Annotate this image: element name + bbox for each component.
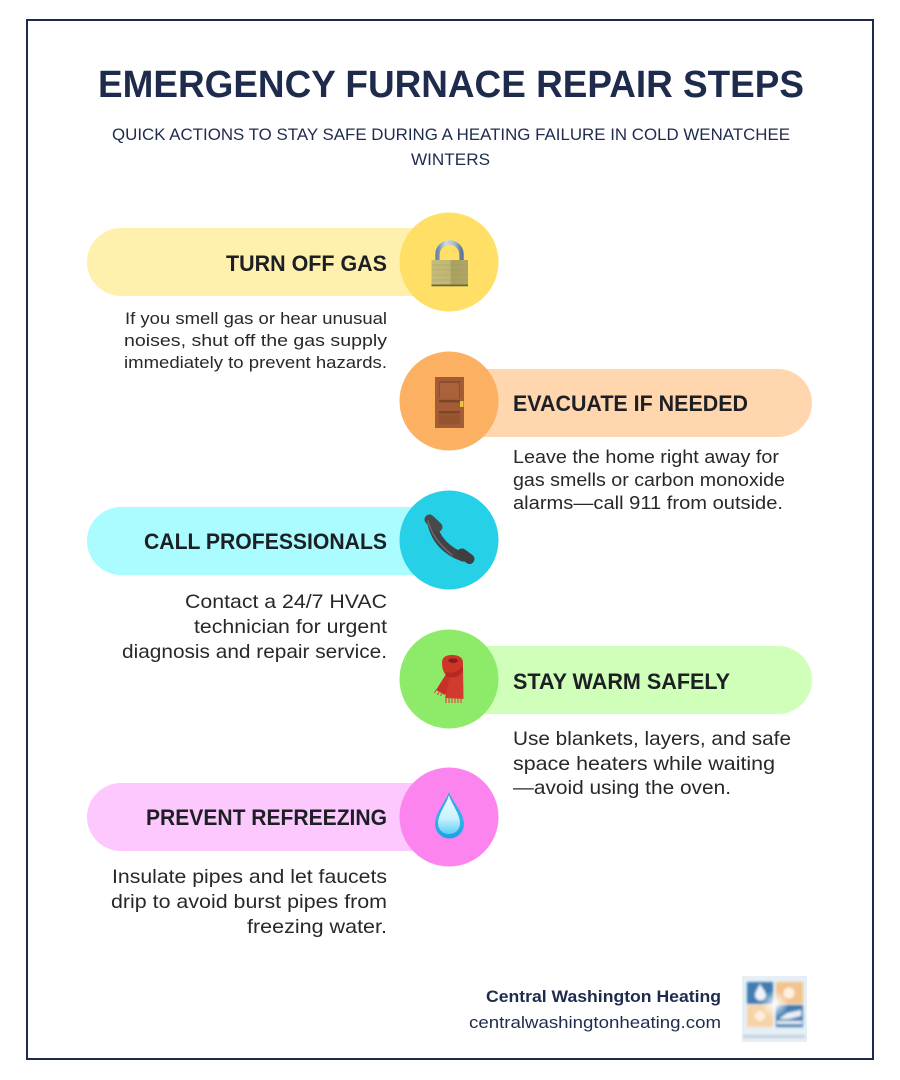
step 2 description [513, 447, 785, 513]
icon: padlock [432, 242, 468, 286]
step 1 description [124, 309, 388, 372]
step 3 description: Contact a 24/7 HVAC [185, 591, 387, 613]
icon: door [435, 377, 464, 428]
step 3 description: diagnosis and repair service. [122, 641, 387, 663]
step 5 pill [87, 783, 467, 851]
step 3 heading: CALL PROFESSIONALS [144, 529, 387, 554]
step 3 description: technician for urgent [194, 616, 388, 638]
step 1 heading: TURN OFF GAS [226, 251, 387, 276]
step 5 description [111, 866, 387, 938]
step 4: stay warm safely [400, 630, 812, 799]
step 3: call professionals [87, 490, 498, 663]
footer company name and website: centralwashingtonheating.com [469, 1013, 721, 1032]
step 3 description [122, 591, 388, 663]
step 1 description: noises, shut off the gas supply [124, 331, 388, 350]
subtitle: WINTERS [411, 150, 490, 169]
subtitle: QUICK ACTIONS TO STAY SAFE DURING A HEATING FAILURE IN COLD WENATCHEE [112, 125, 790, 144]
step 2: evacuate if needed [400, 352, 812, 513]
step 5 description: freezing water. [247, 916, 387, 938]
step 1: turn off gas [87, 212, 498, 372]
icon: red scarf [434, 655, 464, 703]
step 4 pill [432, 646, 812, 714]
step 4 description: Use blankets, layers, and safe [513, 728, 791, 750]
step 1 circle [400, 212, 498, 312]
step 1 description: If you smell gas or hear unusual [125, 309, 387, 328]
step 1 description: immediately to prevent hazards. [124, 353, 387, 372]
company logo [742, 976, 807, 1042]
step 2 circle [400, 352, 498, 450]
step 4 circle [400, 630, 498, 728]
step 5: prevent refreezing [87, 768, 498, 938]
step 3 pill [87, 507, 467, 575]
step 5 description: drip to avoid burst pipes from [111, 891, 387, 913]
step 2 description: alarms—call 911 from outside. [513, 493, 783, 513]
step 2 pill [432, 369, 812, 437]
step 2 description: Leave the home right away for [513, 447, 779, 467]
step 2 heading: EVACUATE IF NEEDED [513, 391, 748, 416]
step 4 description: space heaters while waiting [513, 753, 775, 775]
step 5 heading: PREVENT REFREEZING [146, 805, 387, 830]
footer company name and website [469, 987, 721, 1032]
icon: water drop [435, 792, 464, 838]
step 4 description: —avoid using the oven. [513, 777, 731, 799]
step 4 description [513, 728, 791, 799]
title: EMERGENCY FURNACE REPAIR STEPS [98, 64, 804, 106]
footer company name and website: Central Washington Heating [486, 987, 721, 1006]
icon: telephone handset [428, 520, 470, 559]
subtitle [112, 125, 790, 169]
step 5 circle [400, 768, 498, 866]
step 3 circle [400, 490, 498, 590]
step 2 description: gas smells or carbon monoxide [513, 470, 785, 490]
step 4 heading: STAY WARM SAFELY [513, 669, 730, 694]
step 5 description: Insulate pipes and let faucets [112, 866, 387, 888]
step 1 pill [87, 228, 467, 296]
